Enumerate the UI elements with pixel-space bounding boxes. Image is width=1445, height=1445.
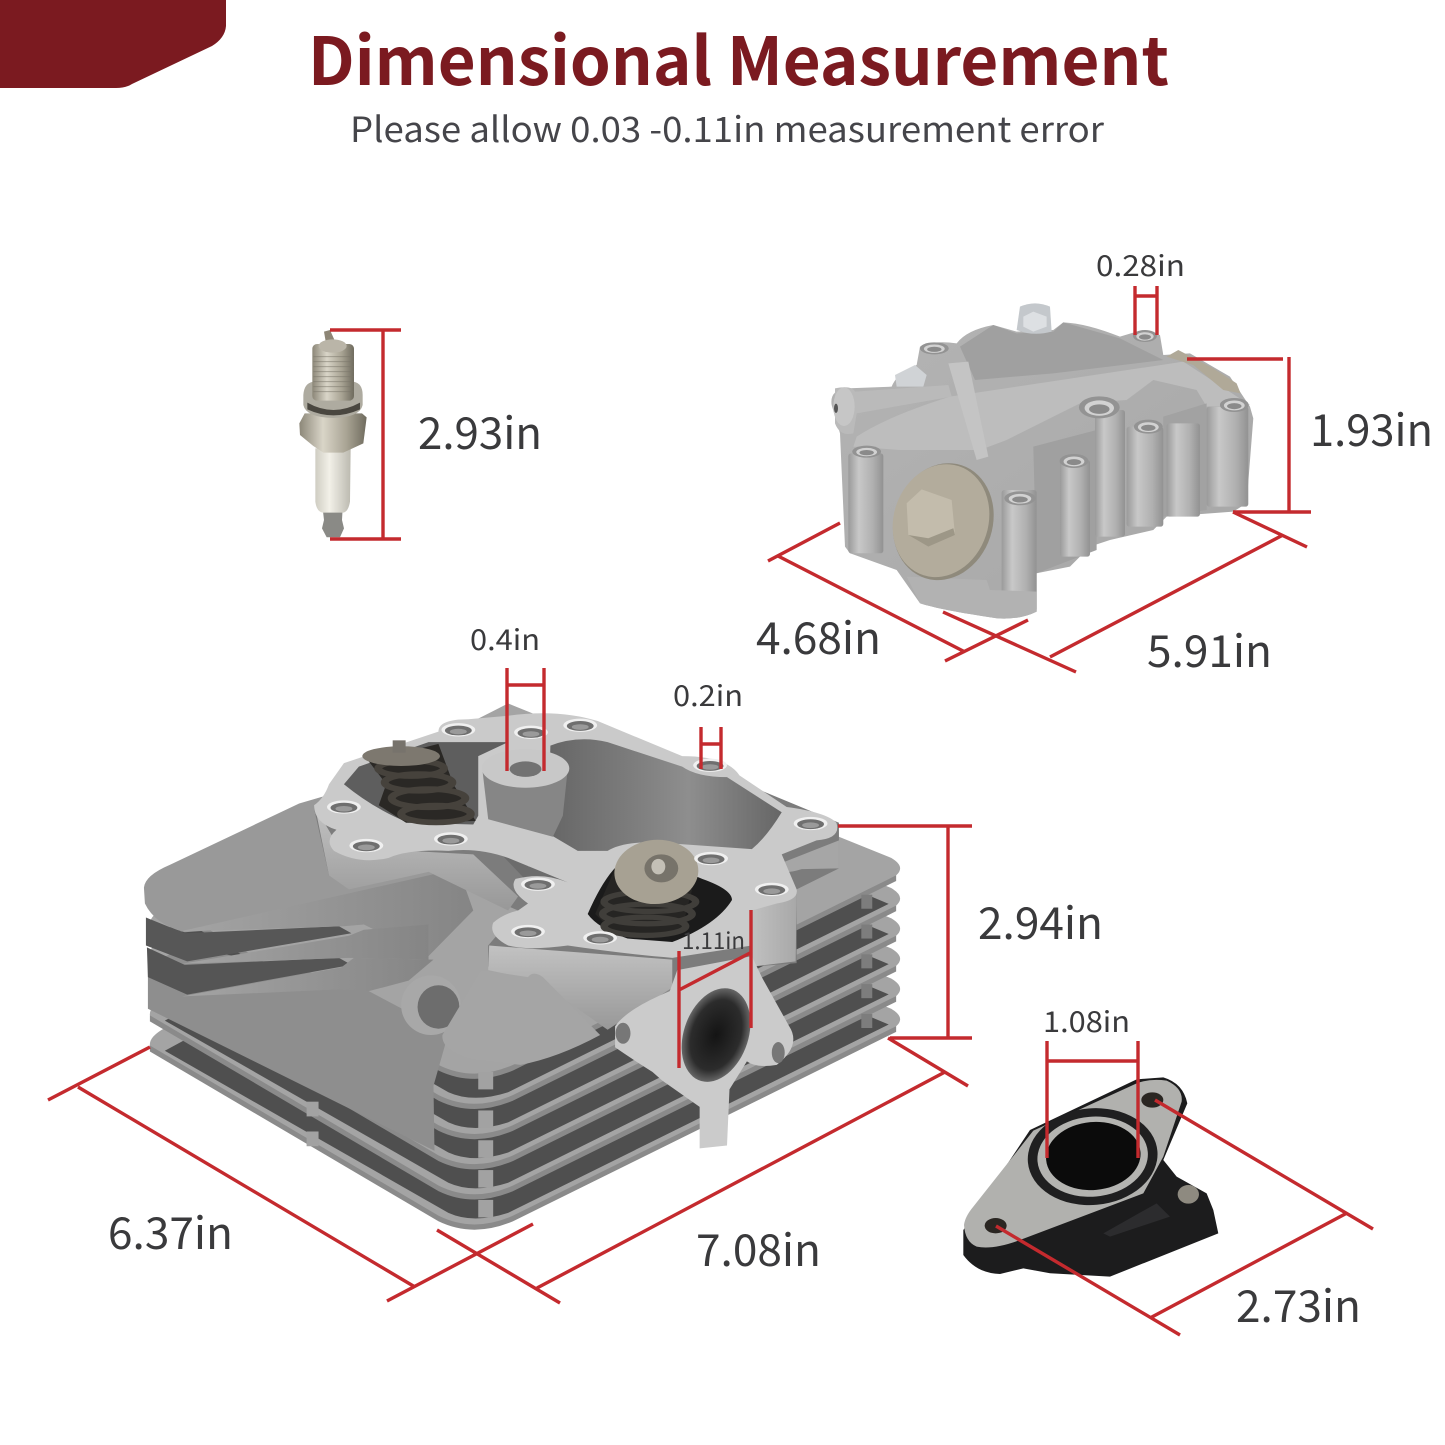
- columns: [848, 453, 883, 553]
- cooling fins stack: [150, 704, 900, 1230]
- housing highlight: [1103, 1203, 1170, 1237]
- dimension: head bolt boss: 0.4in: [470, 617, 540, 659]
- dimension: port width: 1.11in: [682, 922, 745, 956]
- threaded shell: [312, 344, 354, 401]
- sealing washer: [303, 382, 363, 418]
- ridge: [948, 362, 988, 460]
- panel: valve cover: [831, 303, 1253, 619]
- upper ledge: [853, 362, 1250, 450]
- mounting face: [964, 1080, 1182, 1247]
- tan oil plug: [878, 450, 1009, 593]
- wedge fins: [180, 868, 473, 956]
- dimension: manifold length: [996, 1100, 1373, 1335]
- dimension: cover bolt width: 0.28in: [1096, 243, 1185, 285]
- mounting holes: [852, 330, 1249, 505]
- mounting holes: [1141, 1092, 1163, 1108]
- dimension: cover bolt width: [1096, 243, 1185, 335]
- dimension: manifold length: 2.73in: [1236, 1271, 1361, 1335]
- dimension: head small bolt: [673, 673, 743, 769]
- dimension: spark plug height: 2.93in: [418, 398, 542, 462]
- dimension: port width: [679, 910, 751, 1068]
- cover body: [831, 322, 1253, 619]
- dimension: head bolt boss: [470, 617, 544, 771]
- right valve spring: [595, 834, 707, 939]
- black housing: [963, 1077, 1218, 1277]
- dimension: cover length: 5.91in: [1147, 616, 1272, 680]
- terminal: [322, 508, 344, 537]
- ceramic insulator: [315, 448, 351, 513]
- dimension: cover depth: [756, 523, 1028, 667]
- panel: cylinder head: [144, 704, 900, 1230]
- dimension: manifold bore: [1043, 999, 1138, 1158]
- lower flange: [907, 577, 1037, 619]
- fin pins: [307, 1072, 493, 1217]
- title: Dimensional Measurement: [308, 9, 1169, 105]
- top plate: [960, 322, 1163, 380]
- subtitle: Please allow 0.03 -0.11in measurement error: [350, 102, 1104, 153]
- dimension: head length: [437, 1038, 968, 1303]
- central post: [482, 749, 569, 837]
- dimension: head height: [838, 826, 1103, 1038]
- right fin pins: [861, 895, 872, 1028]
- plug port at left: [401, 975, 461, 1035]
- dimension: cover length: [943, 512, 1307, 680]
- top-left plate: [144, 795, 438, 932]
- threaded boss: [1178, 1185, 1199, 1204]
- port block face: [442, 970, 600, 1065]
- electrode tip: [324, 330, 336, 343]
- tan side cap: [1167, 350, 1241, 393]
- dimension: cover depth: 4.68in: [756, 603, 881, 667]
- left lower wall: [148, 946, 448, 1151]
- panel: intake manifold: [963, 1077, 1218, 1277]
- side arm: [835, 385, 952, 434]
- left dark grooves: [146, 917, 351, 961]
- column recesses: [1033, 430, 1097, 573]
- block core: [314, 721, 839, 988]
- dimension: head height: 2.94in: [978, 888, 1103, 952]
- corner banner: [0, 0, 226, 88]
- cylinder flange: [314, 713, 837, 958]
- right lug wall: [752, 893, 797, 967]
- dimension: head depth: 6.37in: [108, 1198, 233, 1262]
- dimension: manifold bore: 1.08in: [1043, 999, 1130, 1041]
- dimension: head length: 7.08in: [696, 1215, 821, 1279]
- dimension: head small bolt: 0.2in: [673, 673, 743, 715]
- hex nut: [299, 413, 367, 453]
- left cavity: [344, 742, 508, 825]
- dimension: cover height: 1.93in: [1310, 395, 1433, 459]
- lower port block: [488, 946, 672, 1030]
- dimension: cover height: [1187, 357, 1433, 513]
- panel: spark plug: [299, 330, 367, 537]
- intake port gasket: [615, 956, 793, 1148]
- dimension: head depth: [48, 1047, 533, 1301]
- bore ring: [1024, 1103, 1162, 1210]
- left valve spring: [362, 740, 476, 823]
- dimension: spark plug height: [330, 330, 542, 539]
- central ribs: [498, 833, 608, 914]
- left wall under flange: [315, 807, 518, 910]
- central cavity: [548, 739, 782, 851]
- silver bolts: [895, 303, 1052, 387]
- right cavity: [588, 858, 732, 942]
- flange bolt holes: [327, 719, 827, 945]
